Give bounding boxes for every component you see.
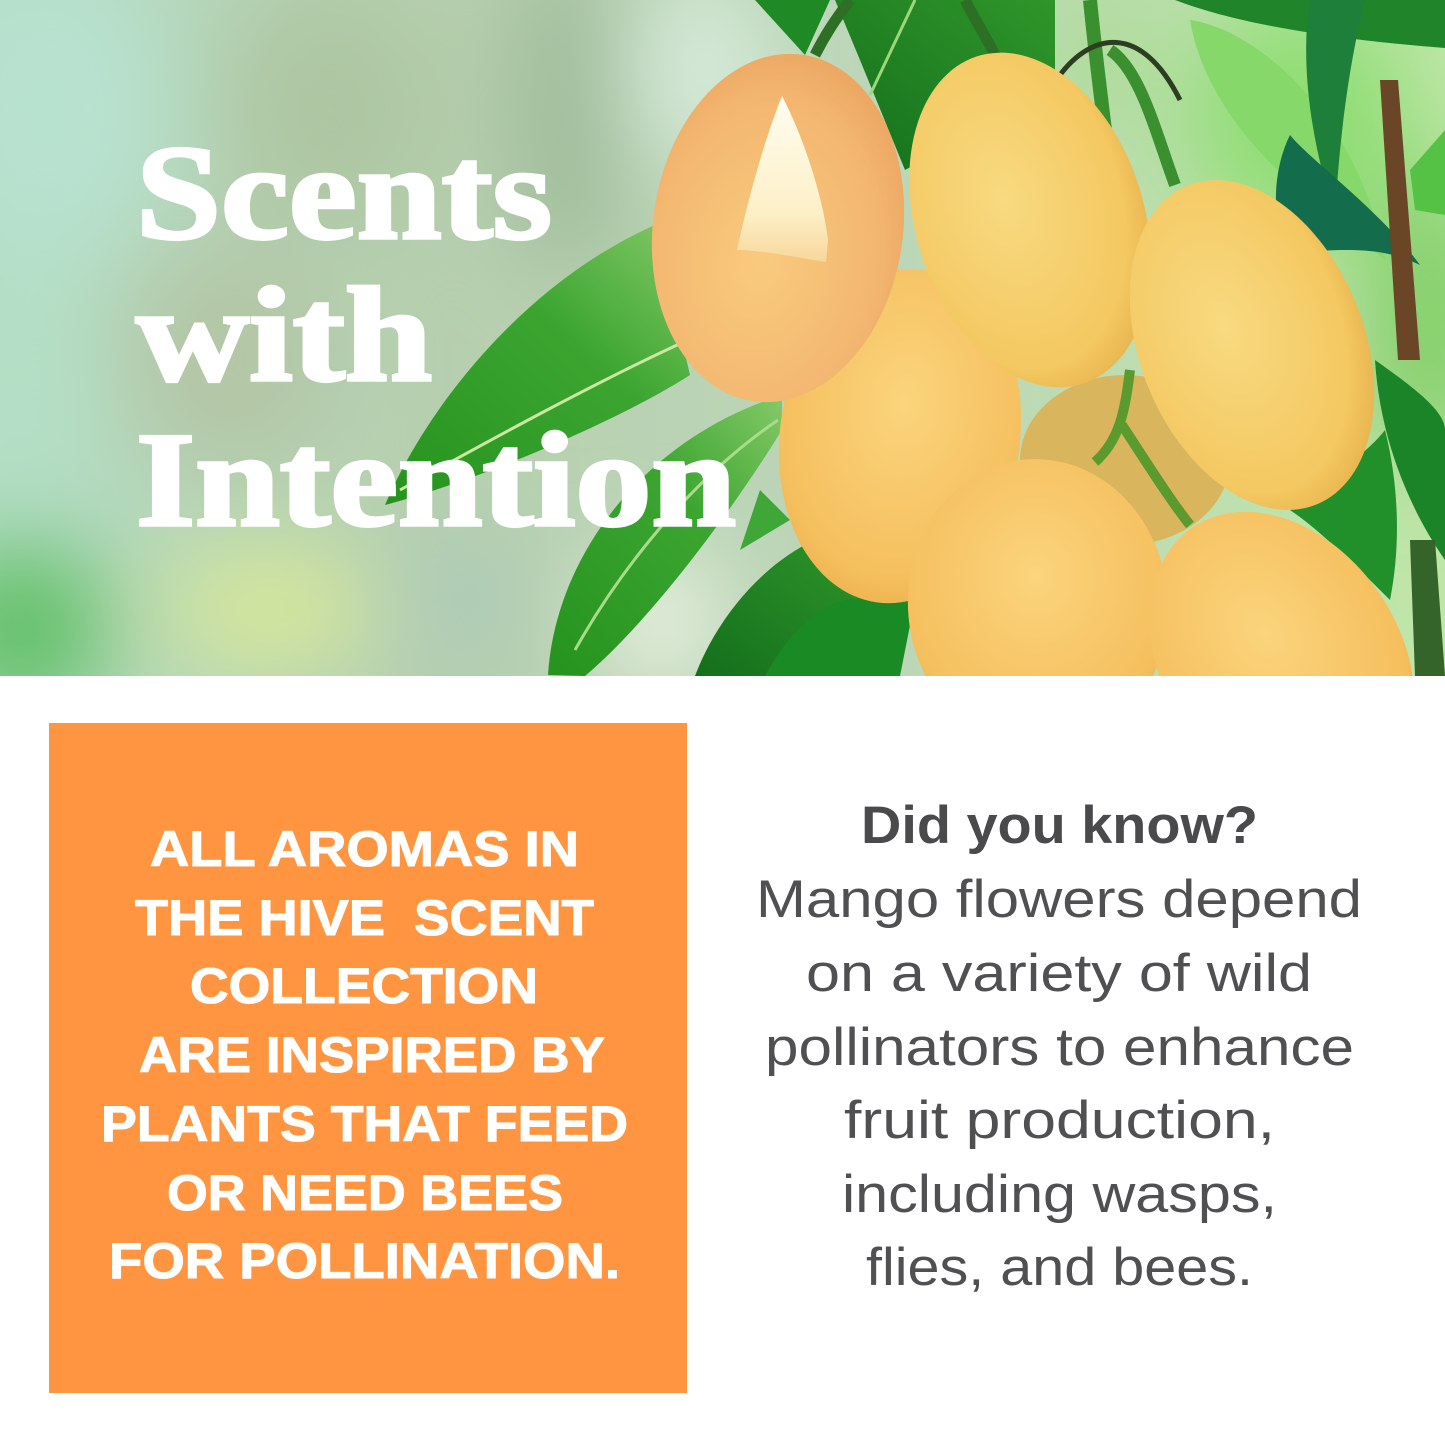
title: with (136, 261, 432, 410)
callout text: OR NEED BEES (167, 1165, 563, 1221)
body text (756, 870, 1362, 1297)
heading: did you know: Did you know? (861, 796, 1258, 855)
body text: Mango flowers depend (756, 870, 1362, 929)
panel: orange callout (49, 723, 687, 1393)
title: Intention (136, 406, 736, 555)
body text: fruit production, (844, 1091, 1275, 1150)
callout text: COLLECTION (190, 958, 538, 1014)
body text: including wasps, (842, 1165, 1277, 1224)
body text: flies, and bees. (866, 1238, 1253, 1297)
callout text: SCENT (414, 890, 594, 946)
callout text: PLANTS THAT FEED (101, 1096, 628, 1152)
title: Scents (136, 119, 552, 268)
callout text: FOR POLLINATION. (109, 1233, 620, 1289)
fruit highlight (737, 96, 828, 262)
photo: mango branch (0, 0, 1445, 676)
text block: did you know (756, 796, 1362, 1297)
callout text (101, 821, 628, 1289)
body text: on a variety of wild (806, 944, 1312, 1003)
title (136, 119, 736, 555)
mango fruits (630, 21, 1445, 859)
callout text: ALL AROMAS IN (150, 821, 579, 877)
callout text: THE HIVE (135, 890, 385, 946)
body text: pollinators to enhance (765, 1018, 1354, 1077)
leaves (385, 0, 1445, 676)
callout text: ARE INSPIRED BY (139, 1027, 605, 1083)
